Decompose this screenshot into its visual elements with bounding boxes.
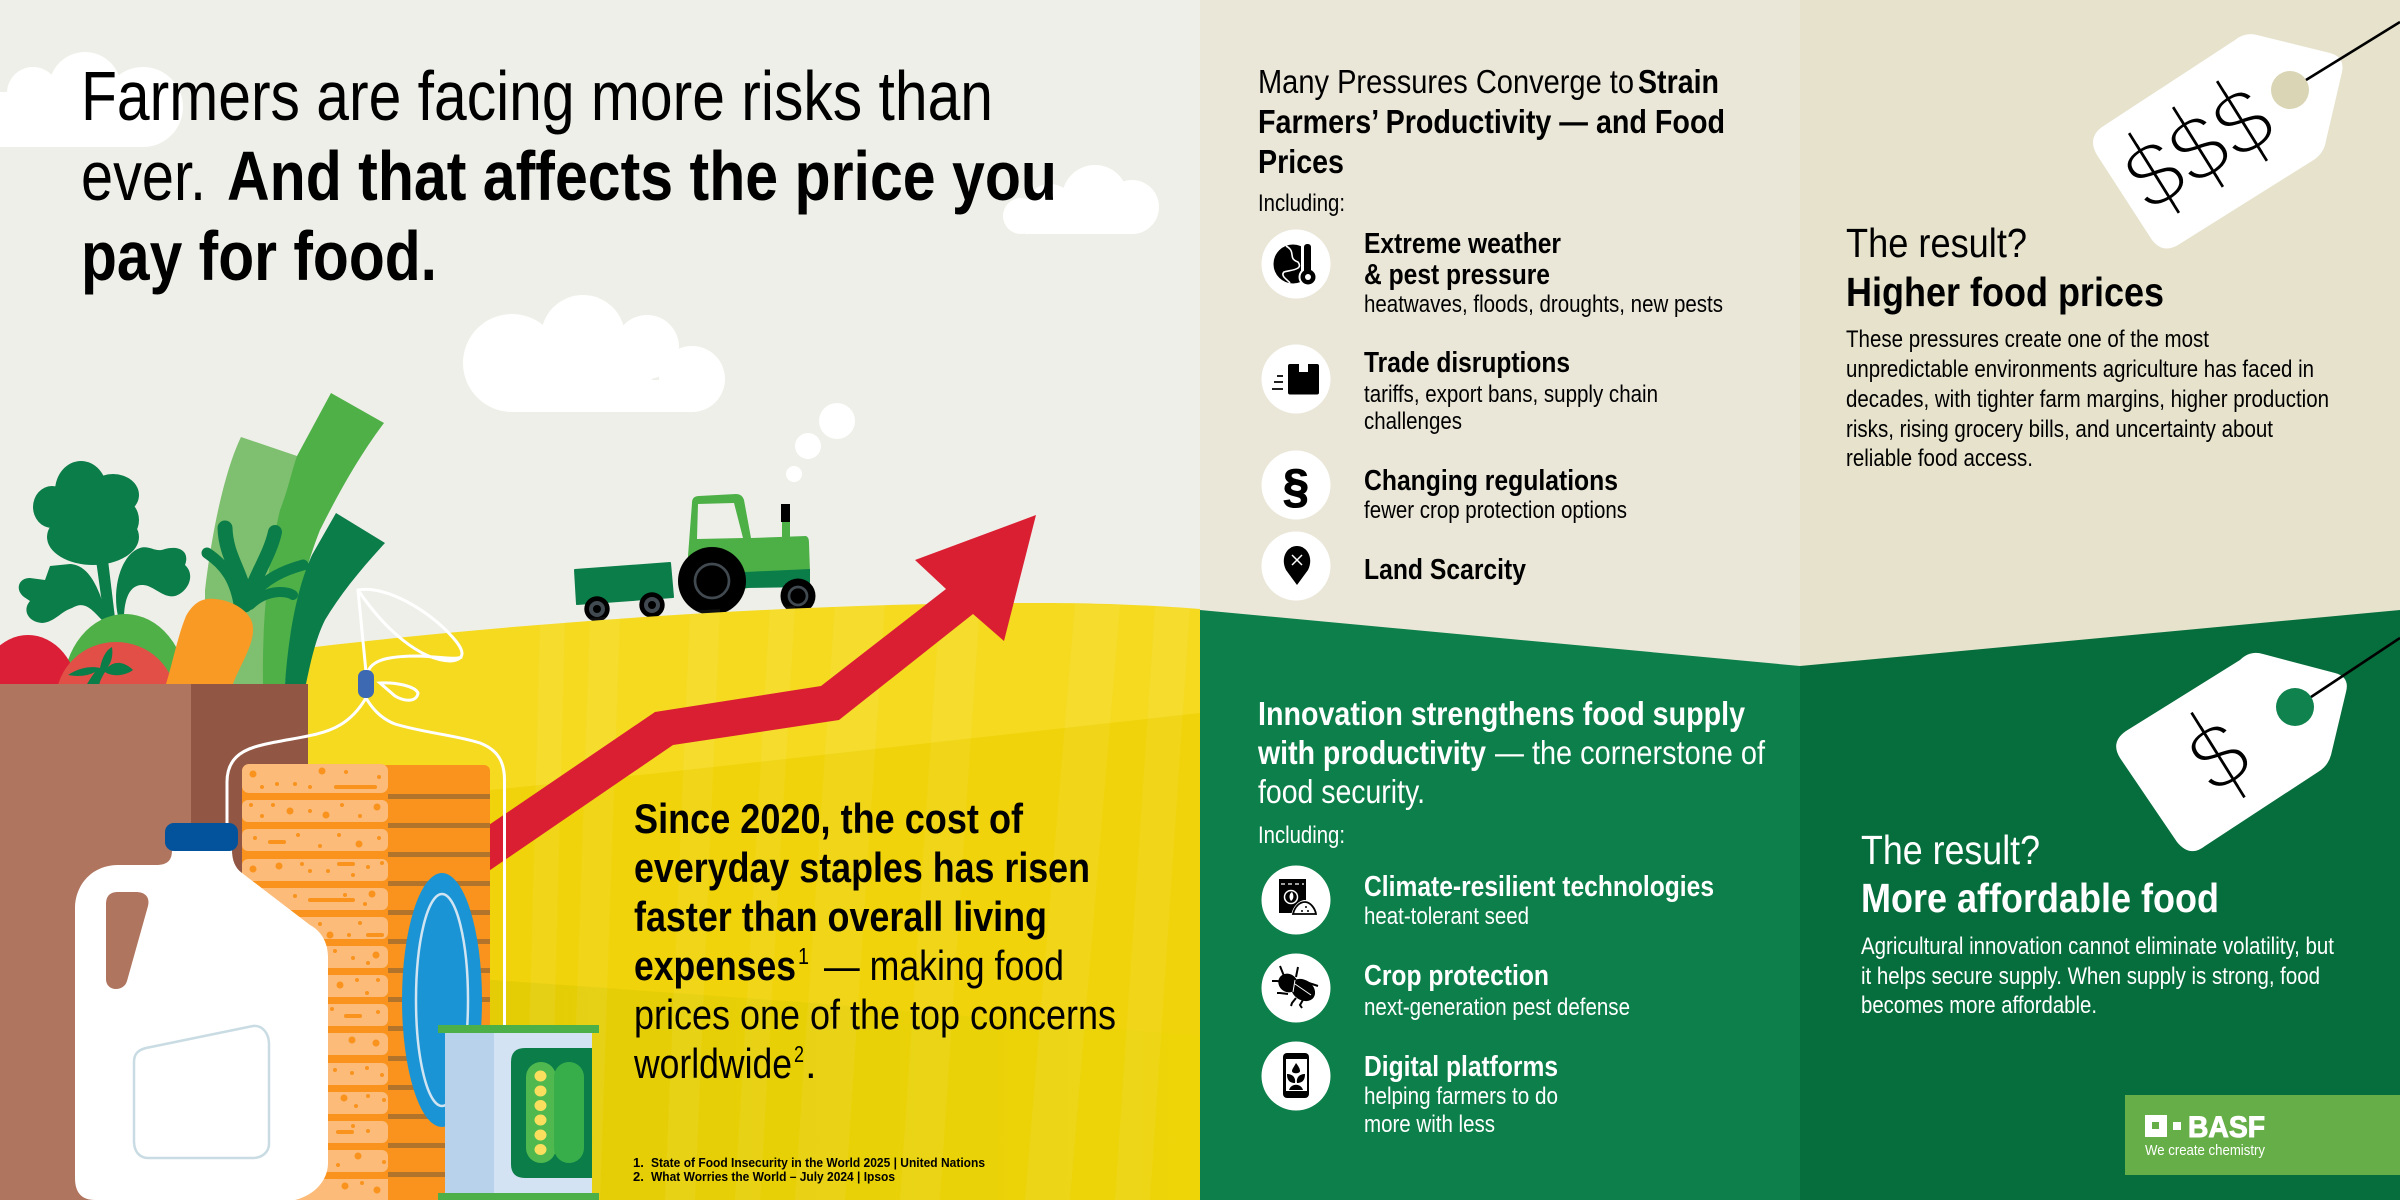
item: extreme weather: & pest pressure — [1364, 259, 1550, 291]
icon: section sign — [1262, 450, 1330, 520]
bag front — [0, 684, 191, 1200]
item: trade disruptions — [1262, 344, 1658, 435]
cloud: top right — [1003, 165, 1159, 234]
text block: higher prices explanation: decades, with tighter farm margins, higher production — [1846, 386, 2329, 413]
text block: staples cost statement: everyday staples has risen — [634, 844, 1090, 891]
icon: price tag with three dollar signs: $ — [2106, 118, 2204, 232]
turnip greens — [19, 461, 190, 623]
item: trade disruptions: tariffs, export bans, supply chain — [1364, 381, 1658, 408]
footnotes: 1. — [633, 1155, 644, 1170]
panel: result background — [1800, 0, 2400, 680]
item: changing regulations: fewer crop protection options — [1364, 497, 1627, 524]
leek — [205, 393, 385, 684]
title: And that affects the price you — [227, 137, 1057, 215]
logo: BASF We create chemistry: We create chemistry — [2145, 1142, 2265, 1159]
item: climate-resilient technologies: heat-tolerant seed — [1364, 903, 1529, 930]
field: yellow hills — [290, 603, 1200, 1200]
text block: affordable food explanation — [1861, 933, 2334, 1019]
text block: affordable food explanation: Agricultural innovation cannot eliminate volatility, but — [1861, 933, 2334, 960]
text block: staples cost statement: — making food — [824, 942, 1064, 989]
heading: pressures converge: Farmers’ Productivity — and Food — [1258, 103, 1725, 140]
title — [81, 57, 1057, 295]
heading: innovation strengthens: food security. — [1258, 773, 1425, 810]
text block: affordable food explanation: becomes more affordable. — [1861, 992, 2097, 1019]
coral tomato — [56, 642, 176, 758]
heading: innovation strengthens: with productivity — [1257, 734, 1487, 771]
panel: innovation green background — [1200, 610, 1800, 1200]
text block: higher prices explanation — [1846, 326, 2329, 472]
item: extreme weather: Extreme weather — [1364, 228, 1561, 260]
arrow: rising red price arrow — [480, 515, 1036, 877]
heading: innovation strengthens — [1257, 695, 1766, 810]
carrot — [166, 599, 253, 684]
illustration: plastic bread wrap with tie — [227, 589, 504, 1025]
smoke puffs — [786, 403, 855, 482]
item: digital platforms: Digital platforms — [1364, 1051, 1558, 1083]
red tomato — [0, 635, 78, 755]
item: crop protection — [1262, 954, 1630, 1022]
icon: price tag with three dollar signs — [2093, 22, 2400, 249]
logo: BASF We create chemistry: BASF — [2188, 1111, 2265, 1144]
text block: higher prices explanation: These pressures create one of the most — [1846, 326, 2209, 353]
bag side — [191, 684, 308, 1200]
icon: price tag with one dollar sign: $ — [2170, 700, 2268, 814]
heading: more affordable food result: The result? — [1861, 827, 2040, 873]
item: trade disruptions: challenges — [1364, 408, 1462, 435]
icon: smartphone with plant — [1262, 1042, 1330, 1110]
icon: beetle — [1262, 954, 1330, 1022]
item: climate-resilient technologies: Climate-resilient technologies — [1364, 871, 1714, 903]
icon: map pin with x — [1262, 532, 1330, 600]
item: land scarcity: Land Scarcity — [1364, 554, 1526, 586]
item: digital platforms — [1262, 1042, 1558, 1138]
footnotes: 2. — [633, 1169, 644, 1184]
text block: staples cost statement: prices one of the top concerns — [634, 991, 1116, 1038]
item: digital platforms: more with less — [1364, 1111, 1495, 1138]
logo: BASF We create chemistry — [2125, 1095, 2400, 1175]
cloud: center — [463, 295, 725, 412]
item: changing regulations — [1262, 450, 1627, 524]
panel: pressures background — [1200, 0, 1800, 680]
item: crop protection: Crop protection — [1364, 960, 1549, 992]
title: ever. — [81, 137, 206, 215]
item: land scarcity — [1262, 532, 1526, 600]
carrot leaves — [207, 528, 303, 610]
text block: staples cost statement: expenses — [634, 942, 796, 989]
text block: higher prices explanation: unpredictable environments agriculture has faced in — [1846, 356, 2314, 383]
illustration: blue can lid — [402, 873, 482, 1127]
item: trade disruptions: Trade disruptions — [1364, 347, 1570, 379]
footnotes: State of Food Insecurity in the World 2025 | United Nations — [651, 1155, 985, 1170]
text block: staples cost statement: Since 2020, the cost of — [634, 795, 1024, 842]
heading: pressures converge: Prices — [1258, 143, 1344, 180]
text block: affordable food explanation: it helps secure supply. When supply is strong, food — [1861, 963, 2320, 990]
item: extreme weather — [1262, 228, 1723, 318]
panel: left sky background — [0, 0, 1200, 1200]
label: including pressures: Including: — [1258, 190, 1345, 217]
title: pay for food. — [81, 217, 437, 295]
icon: seed bag — [1262, 866, 1330, 934]
turnip — [63, 614, 187, 766]
icon: tractor with trailer and smoke — [575, 403, 855, 622]
heading: pressures converge: Strain — [1638, 63, 1719, 100]
item: crop protection: next-generation pest defense — [1364, 994, 1630, 1021]
label: including innovations: Including: — [1258, 822, 1345, 849]
illustration: milk jug — [75, 823, 328, 1200]
text block: staples cost statement: 1 — [798, 943, 809, 969]
heading: more affordable food result — [1861, 827, 2219, 921]
text block: staples cost statement — [633, 795, 1116, 1087]
heading: higher food prices result: Higher food prices — [1846, 269, 2164, 315]
text block: staples cost statement: 2 — [794, 1041, 804, 1067]
text block: higher prices explanation: reliable food access. — [1846, 445, 2033, 472]
heading: more affordable food result: More affordable food — [1861, 875, 2219, 921]
illustration: grocery bag with produce — [0, 393, 385, 1200]
icon: moving package — [1262, 344, 1330, 414]
title: Farmers are facing more risks than — [81, 57, 993, 135]
text block: staples cost statement: . — [805, 1040, 817, 1087]
heading: pressures converge — [1258, 63, 1725, 180]
item: changing regulations: Changing regulations — [1364, 465, 1618, 497]
icon: price tag with three dollar signs: $ — [2194, 66, 2292, 180]
icon: price tag with three dollar signs: $ — [2150, 92, 2248, 206]
footnotes — [633, 1155, 985, 1184]
tomato leaf — [68, 647, 133, 688]
cloud: top left — [0, 52, 183, 147]
heading: higher food prices result — [1846, 220, 2164, 315]
text block: staples cost statement: worldwide — [633, 1040, 792, 1087]
heading: higher food prices result: The result? — [1846, 220, 2027, 266]
illustration: stack of sliced bread — [242, 764, 490, 1200]
footnotes: What Worries the World – July 2024 | Ipsos — [651, 1169, 895, 1184]
icon: globe with thermometer — [1262, 230, 1330, 298]
heading: innovation strengthens: Innovation strengthens food supply — [1258, 695, 1746, 732]
icon: section sign: § — [1283, 459, 1309, 512]
heading: pressures converge: Many Pressures Converge to — [1258, 63, 1634, 100]
item: climate-resilient technologies — [1262, 866, 1714, 934]
text block: staples cost statement: faster than overall living — [634, 893, 1047, 940]
text block: higher prices explanation: risks, rising grocery bills, and uncertainty about — [1846, 416, 2273, 443]
icon: price tag with one dollar sign — [2116, 638, 2400, 851]
panel: affordable green background — [1800, 610, 2400, 1200]
item: digital platforms: helping farmers to do — [1364, 1083, 1558, 1110]
item: extreme weather: heatwaves, floods, droughts, new pests — [1364, 291, 1723, 318]
illustration: can of peas — [438, 1025, 599, 1200]
heading: innovation strengthens: — the cornerstone of — [1495, 734, 1766, 771]
